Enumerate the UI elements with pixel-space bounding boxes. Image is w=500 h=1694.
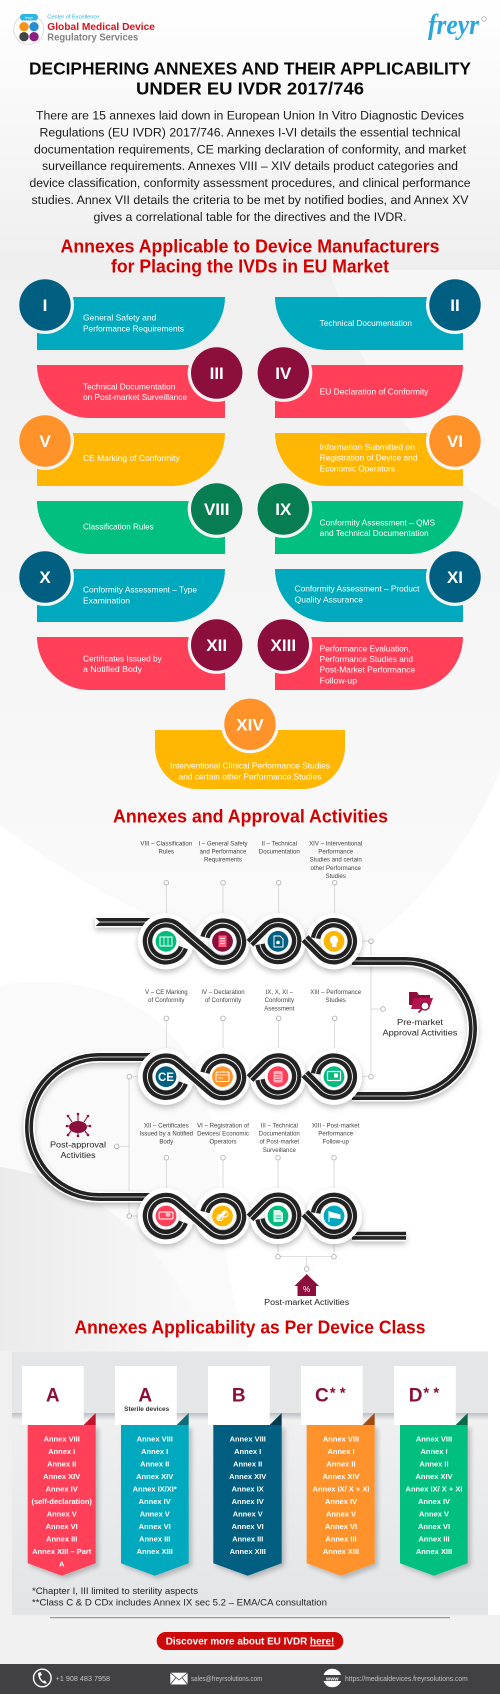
icon: globe [322, 1669, 342, 1687]
column: class B: Annex III [232, 1535, 263, 1544]
column: class A: Annex XIV [43, 1472, 80, 1481]
labels: row 3 annexes: Documentation [259, 1130, 300, 1138]
labels: row 1 annexes: other Performance [310, 865, 362, 872]
labels: row 2 annexes: Studies [326, 997, 346, 1004]
card: Annex VI: Information Submitted on [320, 443, 415, 452]
column: class A sterile devices: Annex VIII [137, 1435, 173, 1444]
column: class A sterile devices: Annex V [140, 1510, 170, 1519]
column: class B: Annex VIII [230, 1435, 266, 1444]
header logo: Global Medical Device Regulatory Services [14, 14, 155, 44]
callout: post-approval activities: Post-approval [50, 1139, 106, 1149]
column: class B: Annex VI [232, 1522, 264, 1531]
card: Annex VIII [37, 483, 242, 554]
card: Annex III: III [210, 364, 224, 383]
card: Annex IX: Conformity Assessment – QMS [320, 518, 436, 527]
card: Annex XIII: Performance Evaluation, [320, 644, 411, 653]
icon: performance screen [324, 1066, 344, 1087]
card: Annex II: II [450, 296, 460, 315]
card: Annex II: Technical Documentation [320, 319, 412, 328]
column: class A sterile devices: Annex VI [139, 1522, 171, 1531]
card: Annex XII: a Notified Body [83, 665, 143, 674]
column: class D: Annex XIV [415, 1472, 453, 1481]
card: Annex VI: Registration of Device and [320, 454, 418, 463]
labels: row 3 annexes: Issued by a Notified [140, 1130, 193, 1138]
labels: row 1 annexes: XIV – Interventional [309, 840, 362, 847]
card: Annex I: I [43, 296, 47, 315]
card: Annex IX: IX [275, 500, 292, 519]
icon: technical documentation [268, 931, 288, 952]
column: class C: Annex V [326, 1510, 356, 1519]
button: discover more: Discover more about EU IVDR here! [166, 1636, 334, 1647]
icon: globe: www [325, 1676, 339, 1682]
column: class A sterile devices: Annex IX/XI* [133, 1485, 177, 1494]
heading: Annexes applicability per device class: Annexes Applicability as Per Device Class [74, 1317, 426, 1337]
card: Annex IV: EU Declaration of Conformity [320, 387, 429, 396]
labels: row 2 annexes: of Conformity [205, 997, 242, 1004]
icon: head with idea [324, 931, 344, 952]
labels: row 3 annexes: Performance [318, 1130, 354, 1138]
icon: general safety document [212, 931, 233, 952]
column: class C: Annex VIII [323, 1435, 359, 1444]
email address: sales@freyrsolutions.com [191, 1676, 262, 1683]
labels: row 2 annexes: Asessment [264, 1005, 295, 1012]
labels: row 1 annexes: Documentation [259, 848, 300, 856]
column: class B [208, 1366, 282, 1576]
column: class A: Annex II [47, 1460, 76, 1469]
labels: row 3 annexes: III – Technical [261, 1122, 298, 1129]
intro paragraph: device classification, conformity assessment procedures, and clinical performance [30, 176, 471, 190]
icon: CE mark [156, 1066, 176, 1087]
callout: post-approval activities [50, 1113, 106, 1160]
column: class A sterile devices: Annex XIII [137, 1547, 173, 1556]
road row 3 with icons [138, 1188, 362, 1244]
column: class B: B [232, 1386, 246, 1407]
labels: row 2 annexes: IV – Declaration [201, 989, 245, 996]
card: Annex VI: Economic Operators [320, 464, 395, 473]
column: class D: Annex VI [418, 1522, 450, 1531]
intro paragraph: gives a correlational table for the directives and the IVDR. [94, 210, 406, 224]
column: class B: Annex IV [232, 1497, 264, 1506]
labels: row 3 annexes [140, 1122, 360, 1154]
icon: phone [34, 1669, 51, 1687]
column: class A sterile devices [115, 1366, 189, 1576]
column: class A sterile devices: Annex III [139, 1535, 170, 1544]
labels: row 1 annexes: II – Technical [262, 840, 297, 847]
card: Annex IV: IV [275, 364, 292, 383]
icon: follow-up flag [324, 1206, 344, 1226]
column: class A: A [46, 1386, 60, 1407]
labels: row 1 annexes: Rules [159, 848, 174, 856]
intro paragraph: surveillance requirements. Annexes VIII – XIV details product categories and [42, 159, 458, 173]
card: Annex XIII: Post-Market Performance [320, 666, 415, 675]
road: long curves and tails [29, 918, 473, 1236]
icon: certificates [156, 1206, 176, 1226]
road row 1 with icons [138, 913, 362, 969]
column: class A: Annex V [47, 1510, 77, 1519]
intro paragraph: studies. Annex VII details the criteria to be met by notified bodies, and Annex XV [32, 193, 469, 207]
title: UNDER EU IVDR 2017/746 [136, 79, 364, 99]
column: class C: Annex XIII [323, 1547, 359, 1556]
card: Annex X [19, 551, 225, 622]
labels: row 2 annexes: V – CE Marking [145, 989, 188, 996]
column: class A: Annex VIII [44, 1435, 80, 1444]
labels: row 1 annexes: Requirements [204, 857, 242, 864]
column: class A sterile devices: Annex IV [139, 1497, 171, 1506]
column: class C: Annex III [325, 1535, 357, 1544]
column: class B: Annex XIII [230, 1547, 266, 1556]
card: Annex XIII: XIII [271, 636, 296, 655]
labels: row 2 annexes: IX, X, XI – [266, 989, 294, 996]
labels: row 1 annexes: Performance [318, 848, 354, 856]
card: Annex I: General Safety and [83, 314, 157, 323]
intro paragraph: documentation requirements, CE marking declaration of conformity, and market [34, 142, 467, 156]
column: class C [301, 1366, 375, 1576]
column: class D: Annex I [420, 1447, 448, 1456]
icon: mail [170, 1673, 188, 1684]
website url: https://medicaldevices.freyrsolutions.com [345, 1676, 468, 1683]
labels: row 2 annexes: Conformity [265, 997, 295, 1004]
column: class C: * * [330, 1385, 346, 1402]
column: class C: Annex XIV [322, 1472, 360, 1481]
labels: row 1 annexes: VIII – Classification [140, 840, 192, 847]
footer contact bar [0, 1664, 500, 1694]
callout: post-market activities: % [303, 1285, 310, 1294]
header logo: Global Medical Device Regulatory Services: freyr [25, 15, 34, 20]
column: class B: Annex V [233, 1510, 263, 1519]
labels: row 3 annexes: Surveillance [263, 1147, 297, 1154]
column: class D: Annex III [418, 1535, 450, 1544]
labels: row 2 annexes: XIII – Performance [310, 989, 362, 996]
column: class A sterile devices: Annex I [141, 1447, 168, 1456]
callout: pre-market approval activities: Approval Activities [382, 1028, 458, 1038]
column: class A [22, 1366, 96, 1576]
column: class D: * * [423, 1385, 439, 1402]
heading: Annexes applicable to device manufacturers [60, 237, 440, 277]
card: Annex XIV [155, 699, 345, 789]
card: Annex XII [37, 619, 242, 690]
card: Annex III: Technical Documentation [83, 382, 176, 391]
column: class B: Annex I [234, 1447, 261, 1456]
column: class A: Annex I [48, 1447, 75, 1456]
card: Annex XII: Certificates Issued by [83, 654, 163, 663]
title [29, 59, 471, 99]
card: Annex III [37, 347, 242, 418]
card: Annex IX: and Technical Documentation [320, 529, 429, 538]
title: DECIPHERING ANNEXES AND THEIR APPLICABILITY [29, 59, 471, 79]
icon: CE mark: CE [158, 1072, 174, 1084]
card: Annex III: on Post-market Surveillance [83, 393, 187, 402]
card: Annex XI: Conformity Assessment – Product [295, 585, 420, 594]
labels: row 3 annexes: Operators [209, 1139, 237, 1146]
column: class D: Annex V [419, 1510, 449, 1519]
column: class C: Annex II [326, 1460, 356, 1469]
footnotes [32, 1586, 327, 1608]
column: class D: Annex II [419, 1460, 449, 1469]
column: class A sterile devices: Annex II [140, 1460, 169, 1469]
card: Annex IX [258, 483, 463, 554]
column: class B: Annex IX [232, 1485, 264, 1494]
card: Annex X: Conformity Assessment – Type [83, 586, 197, 595]
labels: row 3 annexes: XIII - Post-market [312, 1122, 360, 1129]
card: Annex XI: XI [447, 568, 463, 587]
column: class D: Annex IV [418, 1497, 450, 1506]
callout: pre-market approval activities: Pre-market [397, 1017, 444, 1027]
column: class A sterile devices: Annex XIV [136, 1472, 173, 1481]
labels: row 3 annexes: Devices/ Economic [197, 1130, 249, 1138]
footnotes: *Chapter I, III limited to sterility aspects [32, 1586, 199, 1596]
card: Annex VI: VI [447, 432, 463, 451]
card: Annex I: Performance Requirements [83, 324, 184, 333]
labels: row 2 annexes: of Conformity [148, 997, 185, 1004]
column: class D: Annex VIII [416, 1435, 452, 1444]
labels: row 3 annexes: of Post-market [259, 1139, 299, 1146]
labels: row 1 annexes: and Performance [200, 848, 247, 856]
card: Annex X: X [39, 568, 51, 587]
labels: row 3 annexes: VI – Registration of [197, 1122, 249, 1129]
card: Annex XII: XII [206, 636, 227, 655]
column: class A: Annex III [46, 1535, 77, 1544]
icon: declaration card [212, 1066, 233, 1087]
card: Annex XI: Quality Assurance [295, 595, 363, 604]
column: class A: A [59, 1560, 65, 1569]
card: Annex XIII: Follow-up [320, 676, 357, 685]
labels: row 1 annexes: I – General Safety [198, 840, 249, 847]
intro paragraph: There are 15 annexes laid down in European Union In Vitro Diagnostic Devices [36, 108, 464, 122]
card: Annex X: Examination [83, 596, 130, 605]
column: class D: Annex XIII [416, 1547, 452, 1556]
column: class C: Annex IV [325, 1497, 357, 1506]
card: Annex VIII: VIII [204, 500, 229, 519]
labels: row 1 annexes: Studies and certain [310, 857, 362, 864]
labels: row 3 annexes: XII – Certificates [144, 1122, 189, 1129]
heading: Annexes applicable to device manufacturers: Annexes Applicable to Device Manufacturers [60, 237, 440, 257]
column: class C: Annex I [327, 1447, 355, 1456]
card: Annex XIII: Performance Studies and [320, 655, 413, 664]
card: Annex II [275, 279, 481, 350]
callout: post-market activities: Post-market Activities [264, 1297, 349, 1307]
column: class C: C [315, 1386, 329, 1407]
heading: Annexes applicable to device manufacturers: for Placing the IVDs in EU Market [111, 257, 389, 277]
card: Annex VIII: Classification Rules [83, 522, 154, 531]
column: class A sterile devices: Sterile devices [124, 1406, 170, 1413]
card: Annex V: V [39, 432, 51, 451]
column: class B: Annex II [233, 1460, 262, 1469]
labels: row 1 annexes: Studies [326, 873, 346, 880]
header logo: Global Medical Device Regulatory Services: Global Medical Device [47, 22, 155, 33]
icon: document [268, 1206, 288, 1226]
column: class A: Annex XIII – Part [32, 1547, 92, 1556]
card: Annex VI [275, 415, 481, 486]
callout: pre-market approval activities [382, 992, 458, 1038]
header logo: Global Medical Device Regulatory Services: Regulatory Services [47, 32, 139, 44]
heading: Annexes and Approval Activities: Annexes and Approval Activities [113, 807, 388, 827]
column: class A: (self-declaration) [31, 1497, 92, 1506]
column: class A: Annex IV [46, 1485, 78, 1494]
icon: classification rules [156, 931, 176, 952]
header logo: Global Medical Device Regulatory Services: Center of Excellence [47, 14, 99, 20]
column: class D: D [409, 1386, 422, 1407]
labels: row 3 annexes: Body [159, 1139, 174, 1146]
card: Annex XIII [258, 619, 463, 690]
phone number: +1 908 483 7958 [56, 1676, 110, 1683]
intro paragraph: Regulations (EU IVDR) 2017/746. Annexes I-VI details the essential technical [40, 125, 460, 139]
card: Annex XIV: XIV [236, 715, 264, 734]
column: class A: Annex VI [46, 1522, 78, 1531]
card: Annex IV [258, 347, 463, 418]
card: Annex XIV: and certain other Performance Studies [179, 772, 321, 781]
footnotes: **Class C & D CDx includes Annex IX sec 5.2 – EMA/CA consultation [32, 1598, 327, 1608]
card: Annex XIV: Interventional Clinical Performance Studies [170, 762, 330, 771]
connector lines and dots [114, 880, 385, 1271]
icon: registration link [212, 1206, 233, 1226]
card: Annex V: CE Marking of Conformity [83, 454, 181, 463]
intro paragraph [30, 108, 471, 224]
card: Annex V [19, 415, 225, 486]
road row 2 with icons [138, 1049, 362, 1105]
button: discover more [157, 1632, 343, 1650]
logo: freyr: freyr [428, 10, 480, 41]
labels: row 3 annexes: Follow-up [322, 1139, 350, 1146]
card: Annex XI [275, 551, 481, 622]
labels: row 2 annexes [145, 989, 362, 1012]
labels: row 1 annexes [140, 840, 362, 880]
icon: clipboard [268, 1066, 288, 1087]
column: class A sterile devices: A [138, 1386, 152, 1407]
column: class D [394, 1366, 468, 1576]
column: class B: Annex XIV [229, 1472, 266, 1481]
callout: post-market activities [264, 1274, 349, 1307]
callout: post-approval activities: Activities [60, 1150, 96, 1160]
column: class C: Annex IX/ X + XI [313, 1485, 369, 1494]
panel: device class table [12, 1351, 488, 1618]
column: class D: Annex IX/ X + XI [406, 1485, 462, 1494]
column: class C: Annex VI [325, 1522, 357, 1531]
card: Annex I [19, 279, 225, 350]
